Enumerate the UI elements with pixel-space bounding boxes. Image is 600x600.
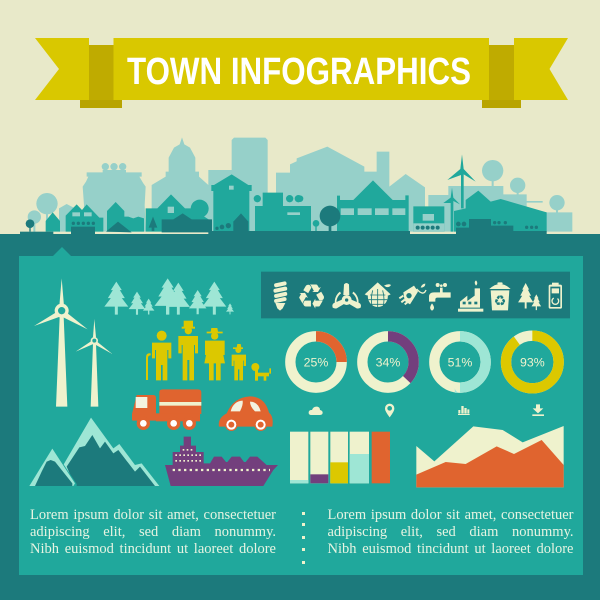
title: TOWN INFOGRAPHICS	[127, 51, 471, 93]
text block left: Lorem ipsum dolor sit amet, consectetuer	[30, 507, 276, 523]
ship	[165, 437, 278, 486]
icon: cloud	[309, 407, 323, 415]
area chart	[416, 426, 564, 487]
icon: eco house globe	[365, 282, 391, 310]
icon: factory	[458, 280, 483, 312]
icon: fan	[332, 283, 361, 309]
donut 25%	[290, 336, 342, 388]
person: grandfather with cane	[146, 331, 171, 380]
text block right: Lorem ipsum dolor sit amet, consectetuer	[328, 507, 574, 523]
icon: water tap	[429, 283, 451, 311]
donut 51%	[434, 336, 486, 388]
icon: map pin	[385, 404, 394, 417]
text block left: adipiscing elit, sed diam nonummy.	[30, 524, 276, 540]
stacked bar chart	[290, 432, 390, 483]
wind turbines	[34, 278, 112, 407]
text block left: Nibh euismod tincidunt ut laoreet dolore	[30, 541, 276, 557]
banner ribbon	[35, 38, 568, 108]
icon: download	[532, 404, 544, 416]
skyline: near buildings and ground	[0, 206, 600, 600]
skyline: building windows	[72, 186, 444, 232]
donut 93%	[506, 336, 559, 388]
small chart icons	[309, 404, 544, 417]
family people	[146, 321, 271, 381]
person: woman with hat	[204, 328, 225, 380]
icon: recycling bin	[489, 282, 511, 310]
text block left	[30, 507, 276, 557]
truck	[132, 389, 201, 430]
car	[219, 396, 273, 431]
skyline: middle buildings	[46, 154, 547, 232]
person: man with top hat	[178, 321, 198, 380]
icon: recycle symbol: ♻	[296, 277, 327, 317]
skyline: far buildings	[28, 137, 572, 232]
icon: battery	[549, 283, 562, 309]
icon strip	[261, 272, 570, 318]
dog	[251, 363, 271, 381]
donut 25%: 25%	[304, 355, 328, 369]
icon: recycling bin: ♻	[494, 294, 506, 310]
main teal panel	[19, 247, 583, 575]
person: child	[232, 344, 246, 380]
mountains	[27, 418, 159, 487]
icon: plug	[399, 284, 426, 304]
column separator dots	[302, 512, 305, 564]
text block right: Nibh euismod tincidunt ut laoreet dolore	[328, 541, 574, 557]
pine trees row	[104, 278, 234, 315]
donut 93%: 93%	[520, 355, 545, 369]
icon: spiral bulb	[273, 281, 288, 311]
donut 51%: 51%	[448, 355, 472, 369]
donut 34%	[362, 336, 414, 388]
text block right	[328, 507, 574, 557]
icon: bars	[458, 406, 470, 415]
icon: two trees	[518, 283, 541, 310]
donut 34%: 34%	[376, 355, 400, 369]
donut charts	[290, 336, 559, 388]
text block right: adipiscing elit, sed diam nonummy.	[328, 524, 574, 540]
